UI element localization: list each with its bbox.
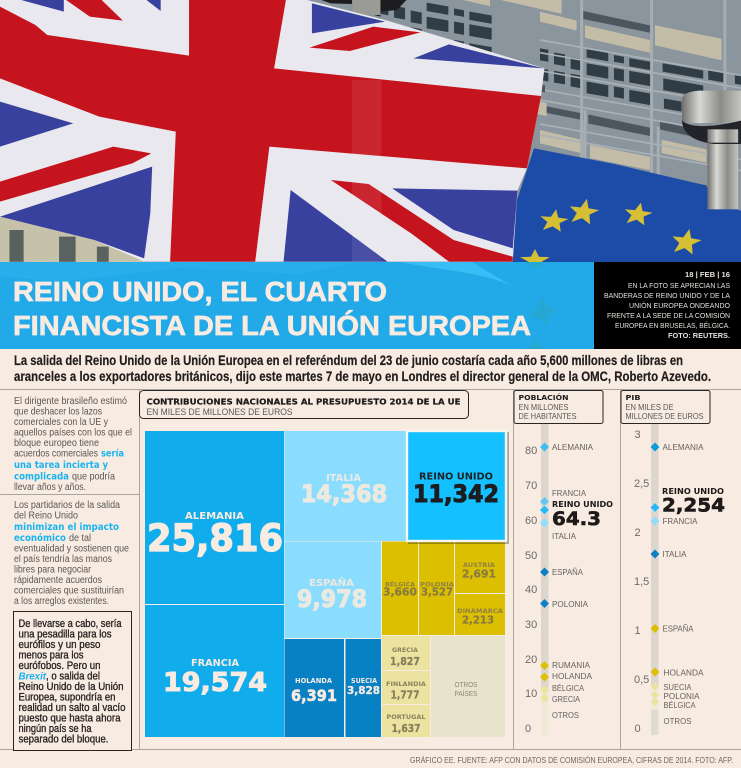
GDP chart heading [621, 390, 710, 424]
Italia: 14,368 [301, 480, 387, 508]
callout: Brexit: Brexit [18, 672, 47, 682]
labels: 64.3 [552, 509, 601, 530]
axis: 80 [525, 445, 537, 457]
paragraph: Brazilian director: llevar años y años. [14, 482, 86, 493]
labels: OTROS [552, 710, 579, 720]
labels: POLONIA [664, 691, 700, 701]
axis: 20 [525, 654, 537, 666]
callout: Brexit: Europea, supondría en [18, 692, 116, 704]
population chart heading: DE HABITANTES [518, 411, 577, 421]
labels: ITALIA [662, 549, 687, 559]
Holanda: HOLANDA [295, 676, 332, 685]
heading: REINO UNIDO, EL CUARTO [13, 276, 387, 307]
callout: Brexit: eurófobos. Pero un [18, 660, 101, 672]
labels: RUMANIA [552, 660, 590, 670]
labels: BÉLGICA [664, 700, 696, 710]
labels: REINO UNIDO [662, 487, 725, 496]
Portugal: PORTUGAL [386, 713, 426, 721]
paragraph: Brazilian director: bloque europeo tiene [14, 438, 99, 449]
axis: 0 [634, 723, 641, 735]
paragraph: Brazilian director: complicada [14, 472, 69, 482]
paragraph: supporters of leaving [14, 500, 129, 607]
axis: 50 [525, 550, 537, 562]
España: ESPAÑA [309, 578, 355, 589]
photo: British and EU flags in front of the European Commission [0, 0, 741, 270]
population chart heading: EN MILLONES [518, 402, 569, 412]
paragraph: Brazilian director: acuerdos comerciales [14, 448, 98, 460]
Bélgica: 3,660 [383, 586, 417, 598]
Finlandia: 1,777 [390, 688, 420, 702]
axis: 40 [525, 584, 537, 596]
callout: Brexit: ningún país se ha [18, 723, 92, 735]
photo caption box: UNIÓN EUROPEA ONDEANDO [629, 301, 730, 310]
title banner [0, 262, 594, 349]
paragraph: supporters of leaving: eventualidad y sostienen que [14, 544, 129, 554]
labels: FRANCIA [662, 516, 698, 526]
data points [650, 442, 660, 706]
heading: FINANCISTA DE LA UNIÓN EUROPEA [13, 310, 531, 341]
labels: ITALIA [552, 531, 576, 541]
axis: 30 [525, 619, 537, 631]
paragraph: supporters of leaving: económico [14, 532, 66, 544]
paragraph: Brazilian director: aquellos países con los que el [14, 428, 132, 438]
labels: OTROS [664, 716, 692, 726]
labels [662, 442, 725, 726]
labels [552, 442, 614, 720]
Reino Unido highlight [407, 431, 509, 544]
paragraph: Brazilian director: que podría [72, 472, 116, 482]
paragraph: Brazilian director: que deshacer los lazos [14, 406, 102, 418]
callout: Brexit: eurófilos y un peso [18, 639, 101, 651]
labels: GRECIA [552, 694, 580, 704]
Alemania [145, 431, 284, 604]
callout: Brexit: , o salida del [46, 670, 100, 682]
axis: 3 [634, 429, 641, 441]
Italia: ITALIA [326, 473, 362, 484]
axis [634, 429, 649, 735]
Polonia: 3,527 [421, 586, 453, 598]
photo caption box: FOTO: REUTERS. [668, 331, 730, 340]
Austria: AUSTRIA [463, 561, 495, 569]
treemap heading: CONTRIBUCIONES NACIONALES AL PRESUPUESTO 2014 DE LA UE [146, 396, 460, 406]
labels: REINO UNIDO [552, 500, 614, 509]
GDP chart heading: PIB [626, 393, 641, 402]
callout: Brexit: Reino Unido de la Unión [18, 681, 124, 693]
Portugal: 1,637 [392, 722, 420, 735]
paragraph: supporters of leaving: rápidamente acuerdos [14, 575, 102, 586]
paragraph: Brazilian director: una tarea incierta y [14, 460, 109, 471]
axis: 70 [525, 480, 537, 492]
paragraph: supporters of leaving: minimizan el impacto [14, 522, 119, 533]
labels: FRANCIA [552, 488, 586, 498]
paragraph: Brazilian director [14, 396, 132, 493]
Dinamarca [455, 594, 505, 635]
otros países: OTROS [454, 682, 478, 689]
photo caption box: FRENTE A LA SEDE DE LA COMISIÓN [607, 311, 730, 320]
Suecia [346, 639, 381, 737]
axis: 1,5 [634, 576, 649, 588]
paragraph: supporters of leaving: libres para negociar [14, 564, 92, 576]
callout: Brexit: realidad un salto al vacío [18, 702, 126, 714]
Holanda [284, 639, 344, 737]
Finlandia [382, 671, 430, 704]
axis: 2,5 [634, 478, 649, 490]
Grecia [382, 636, 430, 670]
Bélgica: BÉLGICA [385, 580, 415, 588]
photo caption box: 18 | FEB | 16 [685, 270, 730, 279]
Francia: 19,574 [163, 668, 267, 698]
GDP chart heading: MILLONES DE EUROS [626, 411, 704, 421]
Grecia: 1,827 [390, 655, 420, 668]
axis [525, 445, 537, 735]
Dinamarca: 2,213 [462, 614, 494, 626]
callout: Brexit: De llevarse a cabo, sería [18, 618, 122, 630]
Holanda: 6,391 [291, 686, 337, 705]
Francia [145, 605, 284, 737]
callout: Brexit: una pesadilla para los [18, 628, 112, 640]
Portugal [382, 705, 430, 737]
otros países [431, 636, 505, 737]
labels: POLONIA [552, 599, 588, 609]
treemap: national contributions [145, 431, 509, 737]
paragraph: Brazilian director: El dirigente brasileño estimó [14, 396, 127, 407]
axis: 2 [634, 527, 641, 539]
Austria [455, 542, 505, 593]
Alemania: ALEMANIA [185, 511, 244, 522]
Suecia: SUECIA [351, 676, 377, 685]
labels: SUECIA [664, 682, 692, 692]
otros países: PAÍSES [454, 689, 478, 698]
left column text [14, 396, 132, 750]
España [284, 542, 381, 638]
Polonia: POLONIA [420, 580, 454, 588]
paragraph: supporters of leaving: de tal [69, 533, 91, 544]
labels: HOLANDA [664, 668, 704, 678]
treemap heading [140, 390, 468, 418]
photo caption box [594, 262, 741, 349]
heading [13, 276, 531, 341]
population chart [525, 424, 614, 735]
Reino Unido highlight: 11,342 [413, 480, 499, 508]
callout: Brexit: puesto que hasta ahora [18, 712, 121, 724]
axis: 1 [634, 625, 641, 637]
labels: ALEMANIA [662, 442, 704, 452]
paragraph: Brazilian director: sería [101, 448, 124, 460]
Suecia: 3,828 [347, 684, 380, 697]
GDP chart [634, 424, 725, 735]
labels: BÉLGICA [552, 683, 584, 693]
Francia: FRANCIA [191, 658, 239, 669]
paragraph: supporters of leaving: a los arreglos existentes. [14, 596, 109, 607]
callout: Brexit [14, 612, 132, 750]
Polonia [419, 542, 454, 635]
GDP chart heading: EN MILES DE [626, 402, 674, 412]
Reino Unido highlight: REINO UNIDO [419, 472, 493, 482]
population chart heading: POBLACIÓN [518, 393, 568, 402]
axis: 10 [525, 688, 537, 700]
population chart heading [514, 390, 603, 424]
axis: 0 [525, 723, 531, 735]
labels: ALEMANIA [552, 442, 593, 452]
Dinamarca: DINAMARCA [457, 607, 503, 615]
Italia [284, 431, 406, 541]
Bélgica [382, 542, 418, 635]
callout: Brexit: menos para los [18, 650, 84, 662]
photo caption box: EN LA FOTO SE APRECIAN LAS [628, 281, 730, 290]
axis: 60 [525, 515, 537, 527]
España: 9,978 [297, 585, 367, 613]
labels: HOLANDA [552, 671, 592, 681]
labels: 2,254 [662, 496, 725, 516]
Austria: 2,691 [462, 568, 496, 580]
data points [540, 442, 550, 702]
Alemania: 25,816 [147, 517, 283, 560]
labels: ESPAÑA [552, 567, 583, 577]
intro text [14, 353, 711, 384]
callout: Brexit: separado del bloque. [18, 734, 108, 746]
Finlandia: FINLANDIA [386, 680, 426, 688]
paragraph: supporters of leaving: comerciales que sustituirían [14, 586, 124, 596]
treemap heading: EN MILES DE MILLONES DE EUROS [146, 407, 292, 417]
paragraph: supporters of leaving: Los partidarios de la salida [14, 500, 121, 511]
paragraph: supporters of leaving: el país tendría las manos [14, 554, 112, 565]
photo caption box: BANDERAS DE REINO UNIDO Y DE LA [604, 291, 731, 300]
paragraph: supporters of leaving: del Reino Unido [14, 510, 78, 522]
Grecia: GRECIA [392, 646, 418, 654]
labels: ESPAÑA [662, 624, 694, 634]
paragraph: Brazilian director: comerciales con la UE y [14, 417, 108, 428]
axis: 0,5 [634, 674, 649, 686]
